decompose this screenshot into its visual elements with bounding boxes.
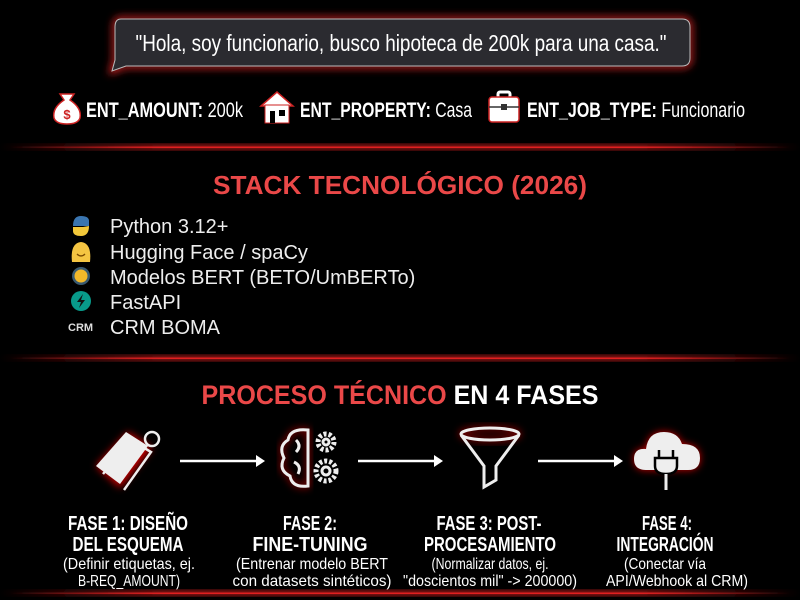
icon: funnel bbox=[461, 428, 519, 487]
phase 2 label: FASE 2: bbox=[283, 513, 337, 535]
icon: money bag bbox=[54, 94, 80, 124]
phase 2 label: (Entrenar modelo BERT bbox=[236, 556, 388, 573]
phase 1 label: (Definir etiquetas, ej. bbox=[63, 556, 195, 573]
entities row: ENT_PROPERTY: Casa bbox=[300, 99, 472, 122]
phase 1 label: FASE 1: DISEÑO bbox=[68, 512, 188, 535]
phase 4 label: FASE 4: bbox=[642, 513, 692, 535]
icon: python bbox=[73, 216, 89, 236]
phase 1 label bbox=[63, 512, 195, 590]
phase 3 label: "doscientos mil" -> 200000) bbox=[403, 573, 577, 590]
arrow 3 bbox=[538, 455, 623, 467]
icon: brain gears bbox=[282, 430, 336, 486]
entities row: ENT_JOB_TYPE: Funcionario bbox=[527, 99, 745, 122]
heading: stack: STACK TECNOLÓGICO (2026) bbox=[213, 170, 587, 200]
entities row bbox=[54, 92, 745, 124]
entities row: ENT_AMOUNT: 200k bbox=[86, 99, 243, 122]
heading: process: PROCESO TÉCNICO EN 4 FASES bbox=[202, 379, 598, 410]
arrow 2 bbox=[358, 455, 443, 467]
phase 3 label: FASE 3: POST- bbox=[436, 513, 542, 535]
icon: briefcase bbox=[489, 92, 519, 122]
speech bubble: "Hola, soy funcionario, busco hipoteca de 200k para una casa." bbox=[136, 30, 666, 56]
icon: sun bbox=[72, 267, 90, 285]
phase 2 label: con datasets sintéticos) bbox=[232, 573, 392, 590]
phase 4 label bbox=[606, 513, 748, 590]
icon: hugging face bbox=[72, 242, 90, 262]
icon: crm: CRM bbox=[68, 322, 93, 334]
stack list bbox=[68, 216, 415, 339]
stack list: Hugging Face / spaCy bbox=[110, 242, 308, 264]
phase 4 label: API/Webhook al CRM) bbox=[606, 573, 748, 590]
arrow 1 bbox=[180, 455, 265, 467]
phase 4 label: (Conectar vía bbox=[624, 556, 706, 573]
icon: money bag: $ bbox=[63, 107, 71, 122]
phase 3 label bbox=[403, 513, 577, 590]
phase 3 label: (Normalizar datos, ej. bbox=[432, 556, 548, 573]
speech bubble bbox=[112, 19, 690, 71]
stack list: Python 3.12+ bbox=[110, 216, 228, 238]
icon: house bbox=[261, 92, 293, 123]
stack list: CRM BOMA bbox=[110, 317, 221, 339]
phase 2 label bbox=[232, 513, 392, 590]
phase 2 label: FINE-TUNING bbox=[252, 534, 368, 556]
phase 4 label: INTEGRACIÓN bbox=[616, 532, 714, 556]
phase 1 label: DEL ESQUEMA bbox=[72, 534, 184, 556]
stack list: FastAPI bbox=[110, 292, 181, 314]
phase 3 label: PROCESAMIENTO bbox=[424, 534, 556, 556]
icon: tags bbox=[96, 432, 159, 490]
stack list: Modelos BERT (BETO/UmBERTo) bbox=[110, 267, 415, 289]
phase 1 label: B-REQ_AMOUNT) bbox=[78, 573, 180, 590]
icon: cloud plug bbox=[634, 432, 700, 490]
icon: fastapi bbox=[71, 291, 91, 311]
